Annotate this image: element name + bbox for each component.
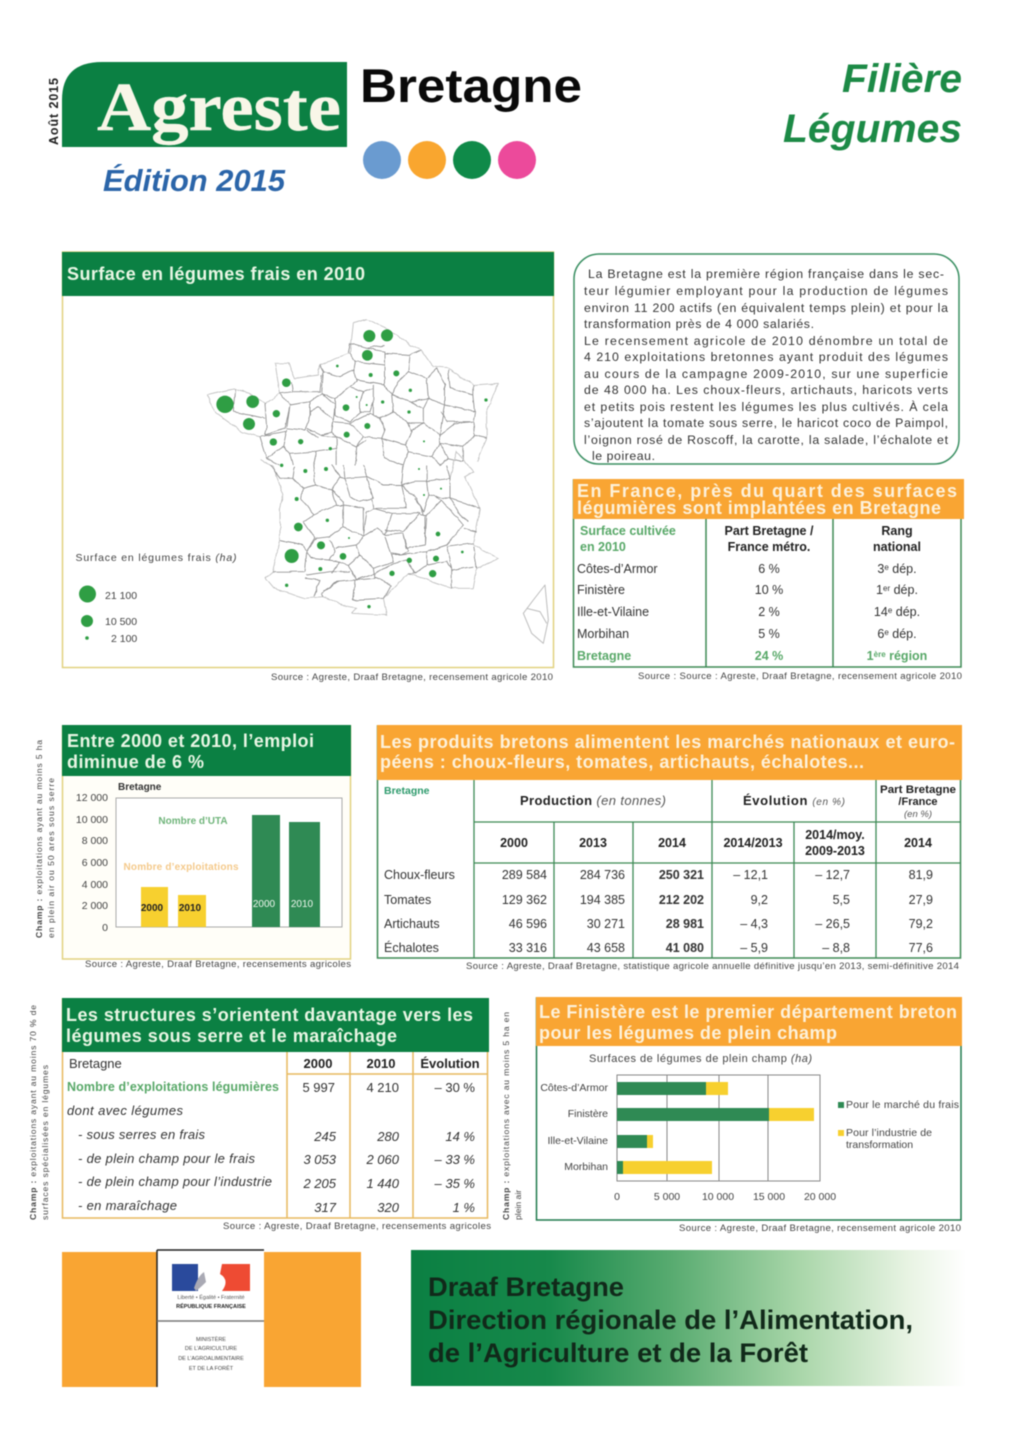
table content: 280 — [376, 1129, 400, 1144]
bar chart: 10 000 — [76, 814, 108, 826]
intro text block: s’ajoutent la tomate sous serre, le haricot coco de Paimpol, — [584, 416, 948, 430]
map legend: 2 100 — [111, 633, 137, 645]
bar chart: Surfaces de légumes de plein champ (ha) — [589, 1053, 812, 1065]
bar chart: Finistère — [568, 1108, 608, 1120]
map of France — [207, 319, 548, 643]
table content: 33 316 — [509, 941, 547, 955]
bar chart: Bretagne — [118, 782, 162, 793]
map legend: 10 500 — [105, 616, 137, 628]
ministry text: ET DE LA FORÊT — [189, 1364, 234, 1372]
ministry text: MINISTÈRE — [196, 1336, 226, 1343]
table content: 2 % — [758, 605, 780, 619]
table content: 2010 — [367, 1056, 395, 1071]
table content: Part Bretagne / — [725, 524, 814, 538]
ministry text: DE L’AGROALIMENTAIRE — [178, 1356, 244, 1362]
production source: Source : Agreste, Draaf Bretagne, statistique agricole annuelle définitive jusqu’en 2013, semi-définitive 2014 — [466, 961, 960, 972]
table content: dép. — [889, 627, 917, 641]
panel: structures table — [62, 998, 489, 1218]
table content: Choux-fleurs — [384, 868, 455, 882]
bar chart: Côtes-d’Armor — [540, 1082, 608, 1094]
panel heading: Surface en légumes frais en 2010 — [67, 264, 365, 284]
table content: 14 % — [445, 1129, 475, 1144]
table content: Côtes-d’Armor — [577, 562, 658, 576]
panel: field vegetables chart — [536, 997, 962, 1220]
table content: 28 981 — [666, 917, 704, 931]
intro text block: teur légumier employant pour la production de légumes — [584, 284, 948, 298]
table content: - sous serres en frais — [78, 1127, 206, 1142]
table content: Ille-et-Vilaine — [577, 605, 649, 619]
table content: Nombre d’exploitations légumières — [67, 1080, 279, 1094]
table content: – 4,3 — [740, 917, 768, 931]
side note: field crops scope: plein air — [513, 1190, 523, 1220]
side note: structures scope: Champ : exploitations ayant au moins 70 % de — [28, 1005, 38, 1220]
table content: Bretagne — [577, 649, 631, 663]
table content: 6 % — [758, 562, 780, 576]
coloured dots — [363, 141, 536, 179]
panel: map of vegetable surface — [62, 252, 554, 668]
side note: field crops scope: Champ : exploitations avec au moins 5 ha en — [501, 1012, 511, 1220]
panel heading — [62, 725, 351, 776]
table content: Finistère — [577, 583, 625, 597]
table content: – 5,9 — [740, 941, 768, 955]
table content: 5 997 — [302, 1080, 335, 1095]
intro text block: l’oignon rosé de Roscoff, la carotte, la salade, l’échalote et — [584, 433, 949, 447]
table content: – 35 % — [434, 1176, 475, 1191]
footer logo block — [62, 1250, 361, 1387]
table content: /France — [898, 796, 938, 808]
table content: 194 385 — [580, 893, 625, 907]
ministry text: Liberté • Égalité • Fraternité — [177, 1294, 245, 1301]
panel heading: Les produits bretons alimentent les marchés nationaux et euro- — [380, 732, 955, 752]
table content: - de plein champ pour le frais — [78, 1151, 256, 1166]
table content: 2014/moy. — [805, 828, 865, 842]
panel heading — [62, 252, 554, 296]
table content: Bretagne — [69, 1056, 122, 1071]
side note: field crops scope — [501, 1012, 523, 1220]
table content: Évolution — [420, 1056, 480, 1071]
table content: e — [884, 628, 889, 637]
table content: 24 % — [755, 649, 783, 663]
table content: 320 — [377, 1200, 400, 1215]
chart legend — [838, 1099, 959, 1151]
table content: 2014 — [904, 836, 932, 850]
side note: employment scope: en plein air ou 50 ares sous serre — [46, 778, 56, 938]
table source: Source : Source : Agreste, Draaf Bretagne, recensement agricole 2010 — [638, 671, 962, 682]
table content: – 26,5 — [815, 917, 850, 931]
bar chart — [76, 782, 342, 934]
table content: e — [884, 563, 889, 572]
map legend: 21 100 — [105, 590, 137, 602]
table content: région — [886, 649, 927, 663]
heading: Filière Légumes — [783, 57, 962, 151]
intro text block — [574, 254, 959, 464]
bar chart: 2000 — [141, 903, 164, 914]
table content: 46 596 — [509, 917, 547, 931]
table content: 1 440 — [366, 1176, 400, 1191]
panel heading — [377, 725, 962, 780]
panel: share of French surface table — [573, 479, 964, 667]
intro text block: La Bretagne est la première région française dans le sec- — [588, 267, 944, 281]
table content: 10 % — [755, 583, 783, 597]
table content: Évolution (en %) — [743, 793, 845, 808]
side note: employment scope — [34, 740, 56, 938]
table content: 3 — [877, 562, 884, 576]
intro text block: le poireau. — [592, 449, 655, 463]
chart legend: Pour le marché du frais — [846, 1099, 959, 1111]
panel heading: En France, près du quart des surfaces — [577, 481, 957, 501]
bar chart: 0 — [102, 922, 108, 934]
chart legend: Pour l’industrie de — [846, 1127, 932, 1139]
panel heading — [536, 997, 962, 1046]
heading: Filière Légumes: Légumes — [783, 107, 962, 151]
table content: 9,2 — [751, 893, 768, 907]
table content: Tomates — [384, 893, 431, 907]
bar chart: Nombre d’exploitations — [124, 862, 239, 873]
panel heading — [62, 998, 489, 1052]
table content: ère — [874, 650, 886, 659]
bar chart: 0 — [614, 1191, 620, 1203]
bar chart: 20 000 — [804, 1191, 836, 1203]
panel heading: péens : choux-fleurs, tomates, artichauts, échalotes... — [380, 752, 864, 772]
table content: – 8,8 — [822, 941, 850, 955]
chart legend: transformation — [846, 1139, 913, 1151]
title: Bretagne: Bretagne — [360, 60, 582, 113]
table content: 1 — [876, 583, 883, 597]
panel heading: légumes sous serre et le maraîchage — [66, 1026, 397, 1046]
table content: – 33 % — [434, 1152, 475, 1167]
panel: production table — [377, 725, 962, 958]
bar chart: Nombre d’UTA — [158, 816, 228, 827]
table content: 212 202 — [659, 893, 704, 907]
bar chart: 12 000 — [76, 792, 108, 804]
ministry text: RÉPUBLIQUE FRANÇAISE — [176, 1302, 246, 1310]
table content: dép. — [890, 583, 918, 597]
table content: 2 205 — [302, 1176, 337, 1191]
bar chart: 10 000 — [702, 1191, 734, 1203]
panel heading: pour les légumes de plein champ — [539, 1023, 837, 1043]
table content: 79,2 — [909, 917, 933, 931]
table content: 43 658 — [587, 941, 625, 955]
ministry text: DE L’AGRICULTURE — [185, 1346, 237, 1352]
panel heading: légumières sont implantées en Bretagne — [577, 498, 941, 518]
table content: 2 060 — [365, 1152, 400, 1167]
intro text block: au cours de la campagne 2009-2010, sur une superficie — [584, 367, 948, 381]
panel heading: diminue de 6 % — [67, 752, 204, 772]
intro text block: de 48 000 ha. Les choux-fleurs, artichauts, haricots verts — [584, 383, 948, 397]
table content: 1 % — [453, 1200, 475, 1215]
table content: 4 210 — [366, 1080, 399, 1095]
table content: - en maraîchage — [78, 1198, 177, 1213]
table content: 77,6 — [909, 941, 933, 955]
table content: 3 053 — [303, 1152, 337, 1167]
table content: 2000 — [500, 836, 528, 850]
panel heading: Les structures s’orientent davantage vers les — [66, 1005, 473, 1025]
panel heading: Entre 2000 et 2010, l’emploi — [67, 731, 314, 751]
logo: Agreste: Agreste — [97, 69, 341, 145]
table content: er — [883, 584, 890, 593]
intro text block: environ 11 200 actifs (en équivalent temps plein) et pour la — [584, 301, 948, 315]
table content: e — [888, 606, 893, 615]
table content: 30 271 — [587, 917, 625, 931]
employment source: Source : Agreste, Draaf Bretagne, recensements agricoles — [85, 959, 351, 970]
table content: 41 080 — [666, 941, 704, 955]
side note: structures scope: surfaces spécialisées en légumes — [40, 1065, 50, 1220]
bar chart: 8 000 — [82, 835, 108, 847]
table content — [384, 784, 956, 955]
bar chart: 6 000 — [82, 857, 108, 869]
heading: Filière Légumes: Filière — [842, 57, 962, 101]
table content: 317 — [314, 1200, 337, 1215]
bar chart — [540, 1053, 836, 1203]
bar chart: 4 000 — [82, 879, 108, 891]
bar chart: 2010 — [179, 903, 202, 914]
table content: dép. — [892, 605, 920, 619]
table content: 27,9 — [909, 893, 933, 907]
table content: France métro. — [728, 540, 810, 554]
side note: employment scope: Champ : exploitations ayant au moins 5 ha — [34, 740, 44, 938]
table content: 2000 — [304, 1056, 332, 1071]
table content: 250 321 — [659, 868, 704, 882]
intro text block: Le recensement agricole de 2010 dénombre un total de — [584, 334, 948, 348]
footer banner: Draaf Bretagne: Draaf Bretagne — [428, 1272, 624, 1302]
table content: – 30 % — [435, 1080, 475, 1095]
table content: 2013 — [579, 836, 607, 850]
table content: – 12,1 — [733, 868, 768, 882]
date label: Août 2015 — [47, 78, 61, 145]
table content: Échalotes — [384, 940, 439, 955]
bar chart: 2010 — [291, 899, 314, 910]
table content: Artichauts — [384, 917, 440, 931]
bar chart: 15 000 — [753, 1191, 785, 1203]
table content: – 12,7 — [815, 868, 850, 882]
table content: (en %) — [904, 809, 932, 820]
panel: employment chart — [62, 725, 351, 959]
table content: national — [873, 540, 921, 554]
table content: Production (en tonnes) — [520, 793, 666, 808]
bar chart: 2 000 — [82, 900, 108, 912]
icon: Marianne flag — [172, 1264, 250, 1291]
table content: 2009-2013 — [805, 844, 865, 858]
edition label: Édition 2015 — [103, 163, 286, 198]
footer banner: Draaf Bretagne: Direction régionale de l’Alimentation, — [428, 1305, 913, 1335]
bar chart: Ille-et-Vilaine — [547, 1135, 608, 1147]
bar chart: 2000 — [253, 899, 276, 910]
bar chart: Morbihan — [564, 1161, 608, 1173]
table content: 81,9 — [909, 868, 933, 882]
table content: 5,5 — [833, 893, 850, 907]
side note: structures scope — [28, 1005, 50, 1220]
table content: Morbihan — [577, 627, 629, 641]
map legend: Surface en légumes frais (ha) — [76, 552, 236, 564]
table content: Surface cultivée — [580, 524, 676, 538]
structures source: Source : Agreste, Draaf Bretagne, recensements agricoles — [223, 1221, 491, 1232]
field chart source: Source : Agreste, Draaf Bretagne, recensement agricole 2010 — [679, 1223, 961, 1234]
table content: dép. — [889, 562, 917, 576]
table content: 5 % — [758, 627, 780, 641]
table content: 284 736 — [580, 868, 625, 882]
table content: 14 — [874, 605, 888, 619]
table content: - de plein champ pour l’industrie — [78, 1174, 272, 1189]
table content: 245 — [313, 1129, 337, 1144]
ministry text — [176, 1294, 246, 1372]
table content — [67, 1056, 480, 1215]
table content: Part Bretagne — [880, 784, 956, 796]
table content: Rang — [881, 524, 913, 538]
table content: 6 — [877, 627, 884, 641]
table content: 129 362 — [502, 893, 547, 907]
map legend — [76, 552, 236, 645]
intro text block: transformation près de 4 000 salariés. — [584, 317, 814, 331]
table content: en 2010 — [580, 540, 626, 554]
table content: 1 — [867, 649, 874, 663]
footer banner: Draaf Bretagne: de l’Agriculture et de la Forêt — [428, 1338, 808, 1368]
table content: dont avec légumes — [67, 1103, 184, 1118]
panel heading — [573, 479, 964, 519]
table content: Bretagne — [384, 785, 430, 797]
panel heading: Le Finistère est le premier département breton — [539, 1002, 957, 1022]
map source: Source : Agreste, Draaf Bretagne, recensement agricole 2010 — [271, 672, 553, 683]
footer banner: Draaf Bretagne — [411, 1250, 966, 1386]
bar chart: 5 000 — [654, 1191, 680, 1203]
table content: 289 584 — [502, 868, 547, 882]
table content: 2014/2013 — [723, 836, 783, 850]
table content — [577, 524, 927, 663]
intro text block: 4 210 exploitations bretonnes ayant produit des légumes — [584, 350, 948, 364]
intro text block: et petits pois restent les légumes les plus cultivés. À cela — [584, 399, 948, 414]
table content: 2014 — [658, 836, 686, 850]
